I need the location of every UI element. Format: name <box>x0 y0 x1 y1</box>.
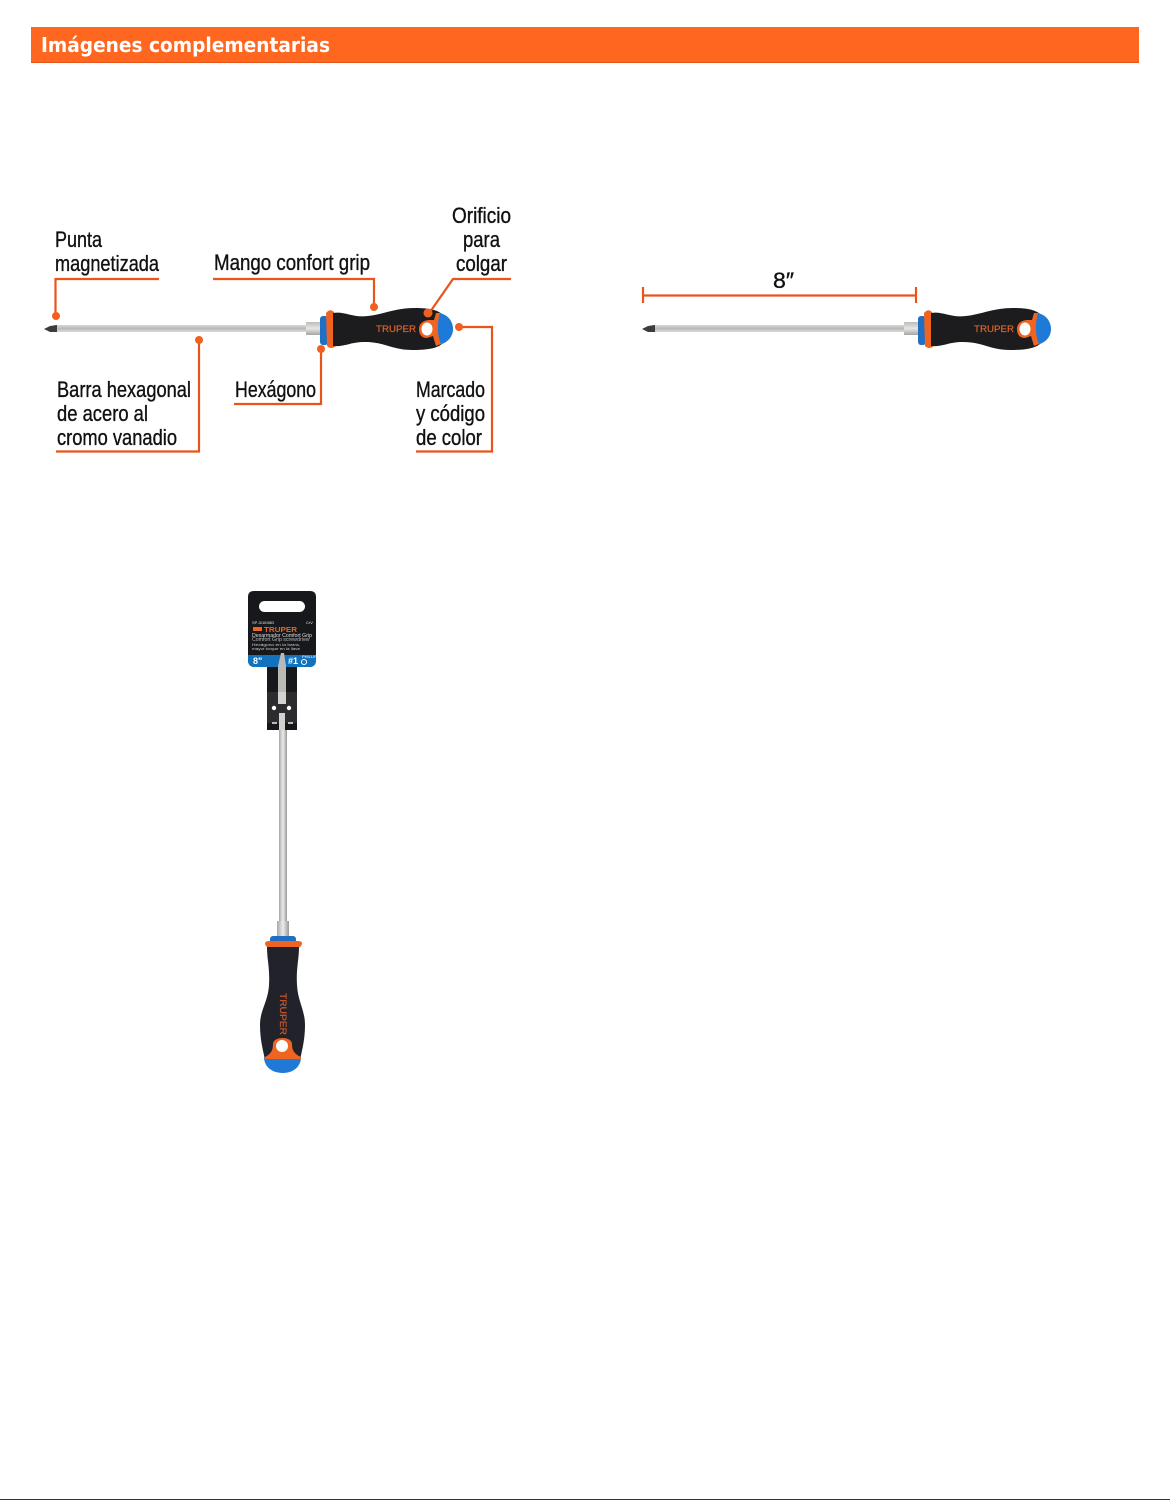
blister card: mayor torque en la llave <box>252 646 301 651</box>
dimension line: 8 inches <box>643 268 916 303</box>
panel: annotated screwdriver <box>44 203 511 452</box>
callout: Barra hexagonal: cromo vanadio <box>57 425 177 450</box>
panel: screwdriver with 8 inch dimension <box>642 268 1051 350</box>
callout: Marcado y código de color: y código <box>416 401 485 426</box>
blister card: 8" <box>253 656 262 666</box>
blister card: CrV <box>306 620 313 625</box>
bottom rule <box>0 1499 1170 1500</box>
callout: Punta magnetizada <box>52 227 160 320</box>
handle, vertical: TRUPER <box>278 993 288 1036</box>
callout: Barra hexagonal: de acero al <box>57 401 148 426</box>
blister card: PHILLIPS <box>302 654 320 659</box>
callout: Marcado y código de color <box>416 323 492 452</box>
dimension line: 8 inches: 8″ <box>773 268 794 293</box>
callout: Marcado y código de color: de color <box>416 425 482 450</box>
handle, vertical <box>260 921 305 1073</box>
callout: Marcado y código de color: Marcado <box>416 377 485 402</box>
blister card: Desarmador Comfort Grip <box>252 633 312 639</box>
blister card: Comfort Grip screwdriver <box>252 637 310 643</box>
blister card: Hexágono en la barra, <box>252 642 300 647</box>
screwdriver, horizontal, no callouts <box>642 308 1051 350</box>
screwdriver, horizontal, no callouts: TRUPER <box>974 324 1015 334</box>
screwdriver, horizontal <box>44 308 453 350</box>
callout: Hexágono <box>234 345 325 404</box>
callout: Hexágono: Hexágono <box>235 377 316 402</box>
callout: Orificio para colgar <box>424 203 511 318</box>
screwdriver, horizontal: TRUPER <box>376 324 417 334</box>
callout: Orificio para colgar: colgar <box>456 251 507 276</box>
blister card: #1 <box>288 656 298 666</box>
panel: packaged screwdriver, vertical <box>248 591 320 1073</box>
callout: Punta magnetizada: magnetizada <box>55 251 160 276</box>
callout: Orificio para colgar: para <box>463 227 501 252</box>
callout: Mango confort grip <box>213 250 378 311</box>
header bar: Imágenes complementarias: Imágenes complementarias <box>41 33 330 57</box>
shaft <box>279 726 287 924</box>
callout: Barra hexagonal: Barra hexagonal <box>57 377 191 402</box>
blister card <box>248 591 320 730</box>
blister card: SP-3/16X8D <box>252 620 274 625</box>
callout: Punta magnetizada: Punta <box>55 227 103 252</box>
callout: Mango confort grip: Mango confort grip <box>214 250 370 275</box>
callout: Barra hexagonal <box>56 336 203 452</box>
blister card: TRUPER <box>264 627 297 634</box>
header bar: Imágenes complementarias <box>31 27 1139 63</box>
callout: Orificio para colgar: Orificio <box>452 203 511 228</box>
